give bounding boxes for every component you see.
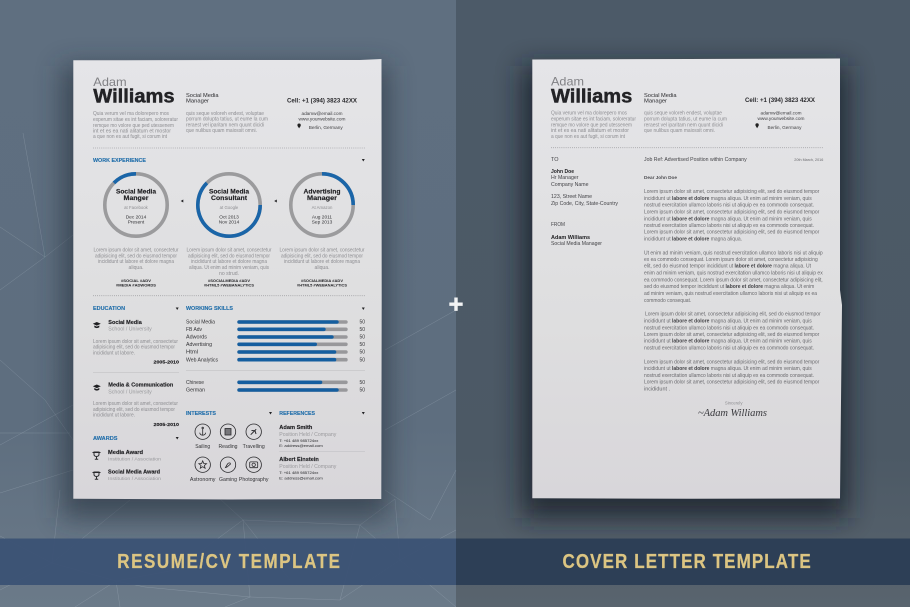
ring 3 text — [304, 188, 341, 225]
intro text left: int et es ea nati alitatum et mostor — [551, 128, 629, 134]
signature: ~Adam Williams — [698, 408, 767, 419]
award 1: Media Award — [108, 450, 143, 456]
description 2: adipisicing elit, sed do eiusmod tempor — [188, 254, 270, 260]
letter paragraph 3: nostrud exercitation ullamco laboris nisi ut aliquip ex ea commodo consequat. — [644, 325, 814, 331]
intro text left: a que non es aut fugit, si corum int — [551, 134, 626, 140]
ring 1 text: Social Media — [116, 188, 157, 196]
hashtags 1: #SOCIAL #ADV — [121, 279, 152, 283]
bar values: 50 — [359, 350, 365, 356]
icon: plane — [246, 424, 261, 439]
description 1: incididunt ut labore et dolore magna — [98, 259, 174, 265]
ring 3 text: Manager — [307, 195, 338, 202]
ring 1 text: Manger — [124, 195, 149, 202]
hashtags 3: #SOCIALMEDIA #ADV — [301, 279, 344, 283]
bar values: 50 — [359, 320, 365, 326]
award 1 — [108, 450, 161, 462]
intro text left: Quia verum vel ma dolorepero mos — [93, 111, 169, 117]
cell number: Cell: +1 (394) 3823 42XX — [745, 97, 816, 104]
caption band: right — [456, 538, 910, 585]
recipient and sender column: Zip Code, City, State-Country — [551, 201, 618, 207]
intro text left: a que non es aut fugit, si corum int — [93, 134, 168, 140]
hashtags 1 — [116, 279, 157, 288]
caption: resume: RESUME/CV TEMPLATE — [117, 550, 340, 572]
bar values: 50 — [359, 380, 365, 386]
letter paragraph 4: nostrud exercitation ullamco laboris nisi ut aliquip ex ea commodo consequat. — [644, 373, 814, 379]
skill labels: Html — [186, 350, 198, 356]
description 1: adipisicing elit, sed do eiusmod tempor — [95, 254, 177, 260]
letter paragraph 1 — [644, 189, 820, 242]
intro text right: porrum dolupta tatius, ut eume la cum — [644, 116, 727, 122]
arrow — [362, 159, 365, 162]
entry 1: 2005-2010 — [154, 360, 179, 366]
heading: AWARDS — [93, 436, 118, 442]
contact details: adamw@email.com — [760, 110, 802, 116]
icon: anchor — [195, 424, 210, 439]
skill labels: Social Media — [186, 320, 215, 326]
recipient and sender column: Adam Williams — [551, 235, 590, 241]
description 2 — [186, 248, 272, 277]
entry 2: Lorem ipsum dolor sit amet, consectetur — [93, 401, 178, 407]
working skills chart — [186, 306, 365, 394]
letter paragraph 1: Lorem ipsum dolor sit amet, consectetur adipisicing elit, sed do eiusmod tempor — [644, 189, 820, 195]
job title — [644, 93, 677, 104]
reference 2: T: +61 489 985724xx — [279, 470, 318, 475]
letter paragraph 1: nostrud exercitation ullamco laboris nisi ut aliquip ex ea commodo consequat. — [644, 223, 814, 229]
letter paragraph 2: commodo consequat. — [644, 298, 691, 304]
intro text right: que nulibus quam maiossit omni. — [186, 128, 257, 134]
bar values: 50 — [359, 357, 365, 363]
ring 1 text: Dec 2014 — [126, 214, 147, 220]
ring 1 text — [116, 188, 157, 225]
paper sheet — [73, 59, 382, 500]
icon: trophy — [92, 472, 100, 479]
icon: graduation cap — [93, 384, 101, 391]
salutation: Dear John Doe — [644, 175, 677, 181]
date: 20th March, 2016 — [794, 158, 823, 162]
heading: INTERESTS — [186, 411, 216, 417]
ring 3 text: Sep 2013 — [312, 219, 333, 225]
entry 1: Social Media — [108, 320, 143, 326]
entry 1: incididunt ut labore. — [93, 350, 135, 356]
resume header — [93, 75, 358, 140]
arrow between rings — [181, 200, 183, 202]
intro text left: remque mo volore que ped utessenem — [93, 123, 174, 129]
last name: Williams — [93, 86, 175, 107]
job title — [186, 93, 219, 104]
education section — [93, 306, 179, 428]
background: left panel — [0, 0, 456, 607]
contact details — [758, 110, 805, 131]
cover letter page — [532, 58, 842, 499]
job title: Social Media — [186, 93, 219, 99]
letter paragraph 3: incididunt ut labore et dolore magna aliqua. Ut enim ad minim veniam, quis — [644, 339, 812, 345]
skill labels: FB Adv — [186, 327, 202, 333]
entry 2: Media & Communication — [108, 383, 174, 389]
entry 1 — [93, 320, 179, 366]
contact details: adamw@email.com — [302, 111, 342, 117]
letter paragraph 3: nostrud exercitation ullamco laboris nisi ut aliquip ex ea commodo consequat. — [644, 346, 814, 352]
intro text right: porrum dolupta tatius, ut eume la cum — [186, 117, 268, 123]
reference 2: Albert Einstein — [279, 457, 319, 463]
description 2: aliqua. Ut enim ad minim veniam, quis — [189, 265, 269, 271]
letter paragraph 1: Lorem ipsum dolor sit amet, consectetur adipisicing elit, sed do eiusmod tempor — [644, 230, 820, 236]
first name: Adam — [551, 74, 584, 88]
letter paragraph 1: Lorem ipsum dolor sit amet, consectetur adipisicing elit, sed do eiusmod tempor — [644, 209, 820, 215]
reference 1: Adam Smith — [279, 425, 313, 431]
bar values — [359, 320, 365, 394]
letter paragraph 2 — [644, 250, 823, 304]
entry 2: adipisicing elit, sed do eiusmod tempor — [93, 407, 175, 413]
hashtags 1: #MEDIA #ADWORDS — [116, 284, 157, 288]
recipient and sender column: FROM — [551, 222, 565, 228]
letter paragraph 2: sed do eiusmod tempor incididunt ut labore et dolore magna aliqua. Ut enim — [644, 284, 814, 290]
hashtags 3 — [297, 279, 348, 288]
entry 2: incididunt ut labore. — [93, 413, 135, 419]
ring 2 text: Consultant — [211, 195, 248, 202]
description 3 — [280, 248, 365, 271]
recipient and sender column: Hr Manager — [551, 175, 579, 181]
interest labels: Photography — [239, 477, 269, 483]
icon: graduation cap — [93, 322, 101, 328]
recipient and sender column: TO — [551, 157, 558, 163]
letter paragraph 3: Lorem ipsum dolor sit amet, consectetur adipisicing elit, sed do eiusmod tempor — [645, 312, 821, 318]
arrow — [362, 308, 365, 310]
reference 2: E: address@email.com — [279, 476, 323, 480]
entry 1: Lorem ipsum dolor sit amet, consectetur — [93, 339, 178, 345]
letter paragraph 2: Ut enim ad minim veniam, quis nostrud exercitation ullamco laboris nisi ut aliquip — [644, 250, 823, 256]
entry 1: adipisicing elit, sed do eiusmod tempor — [93, 345, 175, 351]
bar values: 50 — [359, 327, 365, 333]
interest labels: Reading — [218, 444, 238, 450]
caption: cover letter: COVER LETTER TEMPLATE — [562, 550, 811, 572]
interest labels: Astronomy — [190, 477, 216, 483]
reference 2: Position Held / Company — [279, 464, 337, 470]
interest labels — [190, 444, 269, 483]
arrow — [176, 308, 179, 310]
entry 2: 2005-2010 — [154, 422, 179, 428]
reference 1: Position Held / Company — [279, 432, 337, 438]
ring 2 text — [209, 188, 250, 225]
letter paragraph 3: Lorem ipsum dolor sit amet, consectetur adipisicing elit, sed do eiusmod tempor — [644, 332, 820, 338]
ring 1 text: Present — [128, 219, 145, 225]
entry 2 — [93, 383, 179, 428]
description 1: Lorem ipsum dolor sit amet, consectetur — [94, 248, 179, 254]
intro text left — [93, 111, 178, 140]
bar values: 50 — [359, 388, 365, 394]
description 3: aliqua. — [314, 265, 330, 271]
last name: Williams — [551, 86, 632, 107]
recipient and sender column: Social Media Manager — [551, 241, 602, 247]
ring 1 text: at Facebook — [124, 205, 149, 210]
heading: WORK EXPERIENCE — [93, 158, 146, 164]
intro text left: experum sitae es int faciam, soloreratur — [551, 116, 636, 122]
skill labels: Web Analytics — [186, 357, 219, 363]
timeline ring 1 — [105, 174, 167, 236]
subject line: Job Ref: Advertised Position within Company — [644, 157, 747, 163]
award 1: Institution / Association — [108, 456, 161, 462]
letter header — [551, 74, 816, 140]
letter paragraph 1: nostrud exercitation ullamco laboris nisi ut aliquip ex ea commodo consequat. — [644, 203, 814, 209]
first name: Adam — [93, 75, 127, 89]
ring 3 text: At Amazon — [312, 205, 333, 210]
ring 2 text: at Google — [220, 205, 239, 210]
hashtags 2 — [204, 279, 255, 288]
hashtags 2: #HTML5 #WEBANALYTICS — [204, 284, 255, 288]
letter paragraph 4: Lorem ipsum dolor sit amet, consectetur adipisicing elit, sed do eiusmod tempor — [644, 359, 820, 365]
arrow between rings — [274, 200, 277, 202]
job title: Social Media — [644, 93, 677, 99]
letter paragraph 3 — [644, 312, 821, 352]
page shadow: resume — [62, 66, 388, 518]
description 1: aliqua. — [128, 265, 144, 271]
icon: controller — [220, 457, 236, 472]
ring 3 text: Advertising — [304, 188, 341, 196]
intro text left — [551, 110, 636, 140]
contact details: www.yourwebsite.com — [298, 116, 346, 122]
icon: star — [195, 457, 210, 472]
job title: Manager — [186, 98, 209, 104]
recipient and sender column: Company Name — [551, 182, 588, 188]
background: right panel — [456, 0, 910, 607]
recipient and sender column — [551, 157, 618, 247]
arrow — [362, 412, 365, 414]
intro text right — [644, 110, 727, 134]
letter paragraph 2: elit, sed do eiusmod tempor incididunt ut labore et dolore magna aliqua. Ut — [644, 264, 812, 270]
contact details: Berlin, Germany — [309, 125, 343, 131]
letter paragraph 2: enim ad minim veniam, quis nostrud exercitation ullamco laboris nisi ut aliquip ex — [644, 271, 823, 277]
bar fills — [237, 320, 339, 392]
sign-off: Sincerely — [725, 400, 743, 406]
entry 2: School / University — [108, 389, 152, 395]
resume page — [73, 59, 382, 500]
heading: EDUCATION — [93, 306, 125, 312]
reference 2 — [279, 457, 337, 480]
heading: WORKING SKILLS — [186, 306, 233, 312]
page shadow: cover letter — [522, 66, 848, 518]
hashtags 3: #HTML5 #WEBANALYTICS — [297, 284, 348, 288]
plus sign — [449, 298, 463, 311]
icon: book — [220, 424, 236, 439]
description 3: adipisicing elit, sed do eiusmod tempor — [281, 254, 363, 260]
interest labels: Gaming — [219, 477, 237, 483]
ring 3 text: Aug 2011 — [312, 214, 332, 220]
intro text right — [186, 111, 268, 134]
interest labels: Travelling — [243, 444, 265, 450]
bar tracks — [237, 320, 348, 392]
icon: camera — [246, 457, 261, 472]
description 2: no strud. — [219, 271, 239, 277]
contact details: www.yourwebsite.com — [758, 116, 805, 122]
contact details: Berlin, Germany — [768, 125, 802, 131]
awards section — [92, 436, 179, 482]
intro text right: quis seque voloreh endest, voluptae — [186, 111, 264, 117]
intro text right: reraest vel iparitam nem quunt dicidi — [186, 122, 264, 128]
reference 1: T: +61 489 985724xx — [279, 438, 318, 443]
icon: trophy — [92, 452, 100, 459]
recipient and sender column: 123, Street Name — [551, 194, 592, 200]
job title: Manager — [644, 98, 667, 104]
reference 1: E: address@email.com — [279, 443, 323, 448]
interest labels: Sailing — [195, 444, 210, 450]
description 2: Lorem ipsum dolor sit amet, consectetur — [186, 248, 272, 254]
skill labels — [186, 320, 219, 394]
references section — [279, 411, 365, 480]
background: polygon network lines — [0, 133, 456, 607]
skill labels: Chinese — [186, 380, 204, 386]
award 2: Social Media Award — [108, 470, 160, 476]
letter paragraph 4: Lorem ipsum dolor sit amet, consectetur adipisicing elit, sed do eiusmod tempor — [644, 380, 820, 386]
letter paragraph 1: incididunt ut labore et dolore magna aliqua. — [644, 236, 742, 242]
letter paragraph 4: incididunt ut labore et dolore magna aliqua. Ut enim ad minim veniam, quis — [644, 366, 812, 372]
timeline ring 2 — [198, 174, 260, 236]
description 1 — [94, 248, 179, 271]
intro text right: quis seque voloreh endest, voluptae — [644, 110, 722, 116]
hashtags 2: #SOCIALMEDIA #ADV — [208, 279, 251, 283]
bar values: 50 — [359, 342, 365, 348]
award 2 — [108, 470, 161, 482]
letter paragraph 2: ad minim veniam, quis nostrud exercitation ullamco laboris nisi ut aliquip ex ea — [644, 291, 817, 297]
intro text left: int et es ea nati alitatum et mostor — [93, 128, 171, 134]
description 3: Lorem ipsum dolor sit amet, consectetur — [280, 248, 365, 254]
intro text left: Quia verum vel ma dolorepero mos — [551, 110, 627, 116]
cell number: Cell: +1 (394) 3823 42XX — [287, 97, 358, 104]
ring 2 text: Social Media — [209, 188, 250, 196]
recipient and sender column: John Doe — [551, 169, 574, 175]
timeline ring 3 — [291, 174, 353, 236]
icon: location pin — [755, 123, 759, 128]
letter paragraph 4 — [644, 359, 820, 393]
description 3: incididunt ut labore et dolore magna — [284, 259, 360, 265]
caption band: left — [0, 538, 456, 585]
description 2: incididunt ut labore et dolore magna — [191, 259, 267, 265]
skill labels: Advertising — [186, 342, 212, 348]
letter paragraph 4: incididunt . — [644, 387, 670, 393]
contact details — [298, 111, 346, 131]
bar values: 50 — [359, 335, 365, 341]
heading: REFERENCES — [279, 411, 315, 417]
interests section — [186, 411, 272, 483]
letter paragraph 1: incididunt ut labore et dolore magna aliqua. Ut enim ad minim veniam, quis — [644, 196, 812, 202]
letter paragraph 3: incididunt ut labore et dolore magna aliqua. Ut enim ad minim veniam, quis — [644, 318, 812, 324]
arrow — [176, 437, 179, 440]
intro text right: reraest vel iparitam nem quunt dicidi — [644, 122, 723, 128]
skill labels: Adwords — [186, 335, 208, 341]
intro text left: experum sitae es int faciam, soloreratur — [93, 117, 178, 123]
entry 1: School / University — [108, 326, 152, 332]
arrow — [269, 412, 272, 414]
work experience section — [93, 158, 365, 288]
letter paragraph 2: ea commodo consequat. Lorem ipsum dolor sit amet, consectetur adipisicing elit, — [644, 277, 823, 283]
paper sheet — [532, 58, 842, 499]
letter paragraph 2: ex ea commodo consequat. Lorem ipsum dolor sit amet, consectetur adipisicing — [644, 257, 818, 263]
skill labels: German — [186, 388, 205, 394]
ring 2 text: Nov 2014 — [219, 219, 240, 225]
award 2: Institution / Association — [108, 476, 161, 482]
intro text left: remque mo volore que ped utessenem — [551, 122, 632, 128]
reference 1 — [279, 425, 337, 448]
ring 2 text: Oct 2013 — [219, 214, 239, 220]
intro text right: que nulibus quam maiossit omni. — [644, 128, 715, 134]
icon: location pin — [297, 123, 301, 128]
letter paragraph 1: incididunt ut labore et dolore magna aliqua. Ut enim ad minim veniam, quis — [644, 216, 812, 222]
